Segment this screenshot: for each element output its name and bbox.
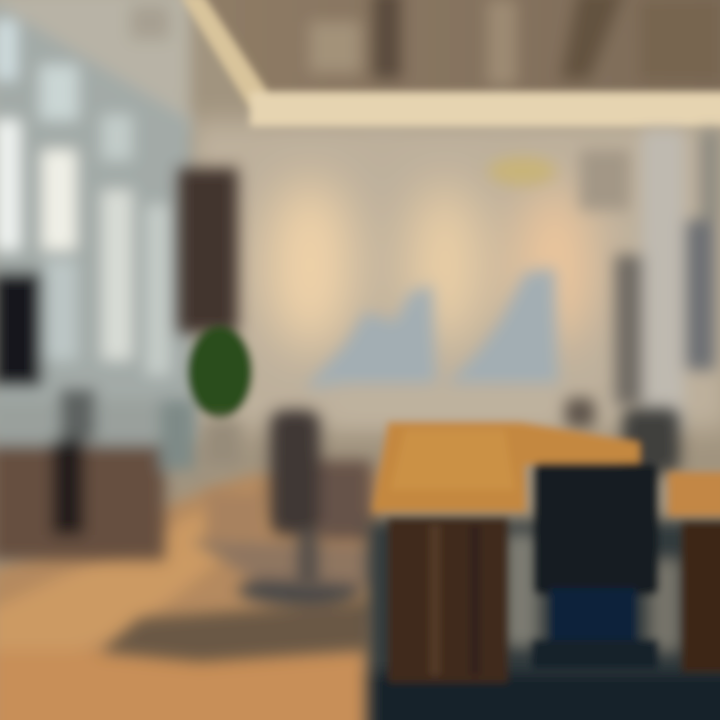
left desks (0, 390, 195, 560)
floor (0, 470, 380, 720)
rug shadows (100, 490, 380, 662)
lower wall band (330, 388, 570, 420)
ceiling (0, 0, 720, 130)
wall bar chart (305, 268, 558, 388)
wall light glows (265, 180, 595, 350)
dark column (178, 168, 238, 333)
grey office chair (270, 410, 372, 585)
ceiling lamp (488, 150, 630, 210)
left windows (0, 0, 195, 440)
plant (188, 326, 252, 465)
dark right floor (368, 520, 720, 720)
background chairs (565, 398, 680, 473)
table legs (388, 518, 720, 683)
table top (372, 422, 720, 516)
right wall panels (615, 130, 720, 430)
ceiling beams (180, 0, 720, 126)
navy office chair (532, 464, 658, 668)
